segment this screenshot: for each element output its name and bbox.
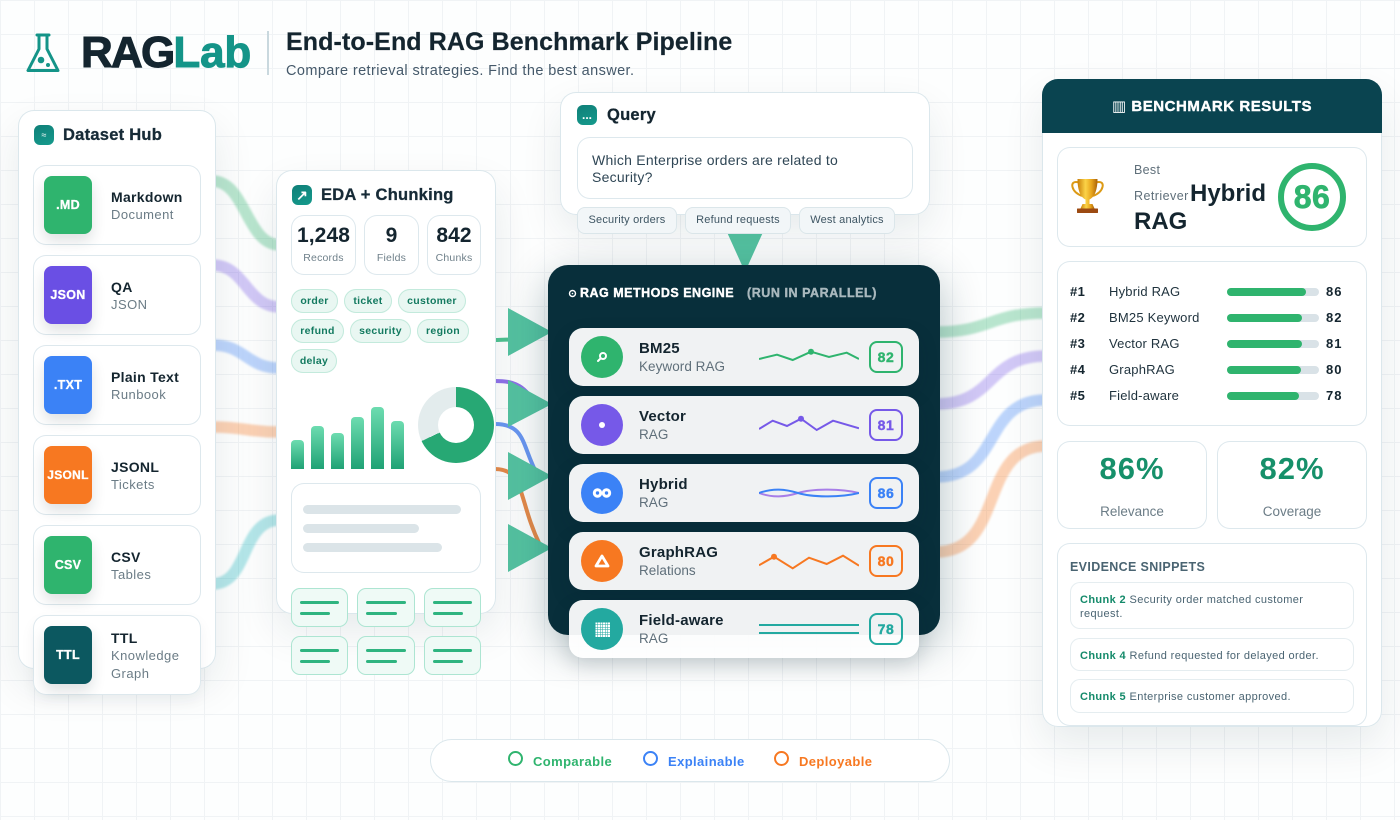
metric: relevance: Relevance (1100, 504, 1164, 519)
card: plain text: .TXT (54, 378, 82, 392)
icon: infinity (581, 472, 623, 514)
card: ranking: 80 (1326, 362, 1342, 377)
text preview box (291, 483, 481, 573)
panel: dataset hub (18, 110, 216, 669)
query text box: Security? (592, 169, 653, 185)
sparkline: hybrid (759, 488, 859, 498)
card: evidence snippets: EVIDENCE SNIPPETS (1070, 560, 1205, 574)
card: best retriever: Hybrid (1190, 180, 1266, 207)
heading: dataset hub: Dataset Hub (63, 126, 162, 144)
stat: chunks (427, 215, 481, 275)
results header: ▥ BENCHMARK RESULTS (1112, 97, 1312, 115)
method: GraphRAG (569, 532, 919, 590)
method: field-aware: Field-aware (639, 612, 724, 629)
method: vector (569, 396, 919, 454)
legend (430, 739, 950, 782)
chip: security orders: Security orders (588, 214, 665, 226)
metric: coverage (1217, 441, 1367, 529)
method: BM25: Keyword RAG (639, 359, 725, 374)
card: ranking (1057, 261, 1367, 426)
stat: records: 1,248 (297, 224, 350, 247)
card: best retriever (1057, 147, 1367, 247)
card: plain text: Runbook (111, 387, 166, 402)
method: GraphRAG: GraphRAG (639, 544, 718, 561)
field chips: refund (300, 325, 335, 337)
card: TTL (33, 615, 201, 695)
card: ranking: #3 (1070, 336, 1085, 351)
chip: security orders (577, 207, 677, 234)
icon: dataset: ≈ (42, 130, 46, 140)
card: ranking: 78 (1326, 388, 1342, 403)
card: TTL: TTL (111, 630, 138, 646)
card: ranking: #4 (1070, 362, 1085, 377)
score ring: 86 (1294, 179, 1330, 215)
title: End-to-End RAG Benchmark Pipeline (286, 28, 732, 56)
card: CSV: CSV (111, 549, 141, 565)
snippet: chunk 2: request. (1080, 608, 1123, 620)
card: ranking: 86 (1326, 284, 1342, 299)
card: QA JSON: JSON (50, 288, 86, 302)
card: ranking: GraphRAG (1109, 362, 1175, 377)
card: QA JSON: QA (111, 279, 133, 295)
stat: fields (364, 215, 419, 275)
card: CSV: Tables (111, 567, 151, 582)
legend: Deployable (799, 754, 872, 769)
field chips: region (426, 325, 460, 337)
panel: benchmark results (1042, 79, 1382, 727)
panel: RAG methods engine (548, 265, 940, 635)
card: markdown: .MD (56, 198, 80, 212)
card: best retriever: Best (1134, 163, 1160, 177)
sparkline: vector (759, 416, 859, 432)
card: JSONL (33, 435, 201, 515)
card: TTL: Knowledge (111, 648, 179, 663)
icon: chat dots (577, 105, 597, 125)
card: markdown (33, 165, 201, 245)
heading: query: Query (607, 106, 656, 124)
card: best retriever: RAG (1134, 208, 1187, 235)
card: JSONL: Tickets (111, 477, 155, 492)
icon: arrow (292, 185, 312, 205)
method: hybrid: Hybrid (639, 476, 688, 493)
field chips: customer (407, 295, 457, 307)
method: hybrid: RAG (639, 495, 668, 510)
card: QA JSON: JSON (111, 297, 147, 312)
panel: EDA and chunking (276, 170, 496, 614)
results header (1042, 79, 1382, 133)
method: vector: RAG (639, 427, 668, 442)
card: plain text: Plain Text (111, 369, 179, 385)
sparkline: field-aware (759, 624, 859, 634)
legend: Comparable (533, 754, 612, 769)
bar chart (291, 407, 404, 469)
icon: gear (568, 290, 576, 298)
snippet: chunk 2: Chunk 2 Security order matched customer (1080, 594, 1303, 606)
stat: fields: 9 (386, 224, 397, 247)
stat: chunks: 842 (436, 224, 472, 247)
card: TTL: Graph (111, 666, 149, 681)
card: JSONL: JSONL (111, 459, 159, 475)
card: evidence snippets (1057, 543, 1367, 726)
method: hybrid: 86 (878, 485, 894, 501)
method: vector: 81 (878, 417, 894, 433)
card: QA JSON (33, 255, 201, 335)
icon: grid (581, 608, 623, 650)
field chips: ticket (353, 295, 383, 307)
card: ranking: Field-aware (1109, 388, 1179, 403)
card: markdown: Markdown (111, 189, 183, 205)
sparkline: GraphRAG (759, 554, 859, 570)
card: markdown: Document (111, 207, 174, 222)
snippet: chunk 2 (1070, 582, 1354, 629)
icon: magnifier (581, 336, 623, 378)
icon: arrow: ↗ (296, 187, 308, 203)
method: field-aware: 78 (878, 621, 894, 637)
snippet: chunk 5 (1070, 679, 1354, 713)
card: ranking: #5 (1070, 388, 1085, 403)
method: BM25: 82 (878, 349, 894, 365)
logo wordmark: RAGLab (81, 28, 251, 77)
card: CSV (33, 525, 201, 605)
card: best retriever: Retriever (1134, 189, 1189, 203)
subtitle: Compare retrieval strategies. Find the best answer. (286, 63, 634, 79)
query text box (577, 137, 913, 199)
query text box: Which Enterprise orders are related to (592, 152, 838, 168)
stat: fields: Fields (377, 252, 406, 264)
card: ranking: Vector RAG (1109, 336, 1180, 351)
card: plain text (33, 345, 201, 425)
stat: chunks: Chunks (436, 252, 472, 264)
icon: chat dots: ... (582, 108, 592, 122)
logo: flask icon (26, 34, 60, 72)
metric: relevance: 86% (1099, 451, 1165, 486)
icon: triangle (581, 540, 623, 582)
legend: Explainable (668, 754, 745, 769)
card: ranking: 81 (1326, 336, 1342, 351)
method: vector: Vector (639, 408, 686, 425)
metric: coverage: Coverage (1263, 504, 1321, 519)
chip: refund requests: Refund requests (696, 214, 780, 226)
heading: EDA + chunking: EDA + Chunking (321, 186, 454, 204)
donut chart (418, 387, 494, 463)
chip: refund requests (685, 207, 791, 234)
metric: coverage: 82% (1259, 451, 1325, 486)
field chips (291, 289, 469, 373)
icon: dataset (34, 125, 54, 145)
header divider (267, 31, 268, 75)
icon: point (581, 404, 623, 446)
card: ranking: 82 (1326, 310, 1342, 325)
field chips: order (300, 295, 329, 307)
method: field-aware: RAG (639, 631, 668, 646)
score ring (1278, 163, 1346, 231)
card: ranking: Hybrid RAG (1109, 284, 1180, 299)
chip: west analytics: West analytics (810, 214, 884, 226)
card: CSV: CSV (55, 558, 81, 572)
method: BM25 (569, 328, 919, 386)
snippet: chunk 4 (1070, 638, 1354, 671)
method: field-aware (569, 600, 919, 658)
snippet: chunk 4: Chunk 4 Refund requested for delayed order. (1080, 650, 1319, 662)
metric: relevance (1057, 441, 1207, 529)
stat: records: Records (303, 252, 344, 264)
icon: trophy (1071, 179, 1104, 213)
field chips: delay (300, 355, 328, 367)
card: JSONL: JSONL (47, 468, 89, 482)
method: BM25: BM25 (639, 340, 680, 357)
panel: query (560, 92, 930, 215)
field chips: security (359, 325, 402, 337)
card: TTL: TTL (56, 648, 80, 662)
sub-heading: run in parallel: (RUN IN PARALLEL) (747, 286, 877, 300)
sparkline: BM25 (759, 348, 859, 362)
method: GraphRAG: 80 (878, 553, 894, 569)
card: ranking: #2 (1070, 310, 1085, 325)
card: ranking: BM25 Keyword (1109, 310, 1200, 325)
method: hybrid (569, 464, 919, 522)
stat: records (291, 215, 356, 275)
snippet: chunk 5: Chunk 5 Enterprise customer approved. (1080, 691, 1291, 703)
chip: west analytics (799, 207, 895, 234)
card: ranking: #1 (1070, 284, 1085, 299)
method: GraphRAG: Relations (639, 563, 696, 578)
chunk cards (291, 588, 481, 675)
heading: engine: RAG METHODS ENGINE (580, 286, 734, 300)
